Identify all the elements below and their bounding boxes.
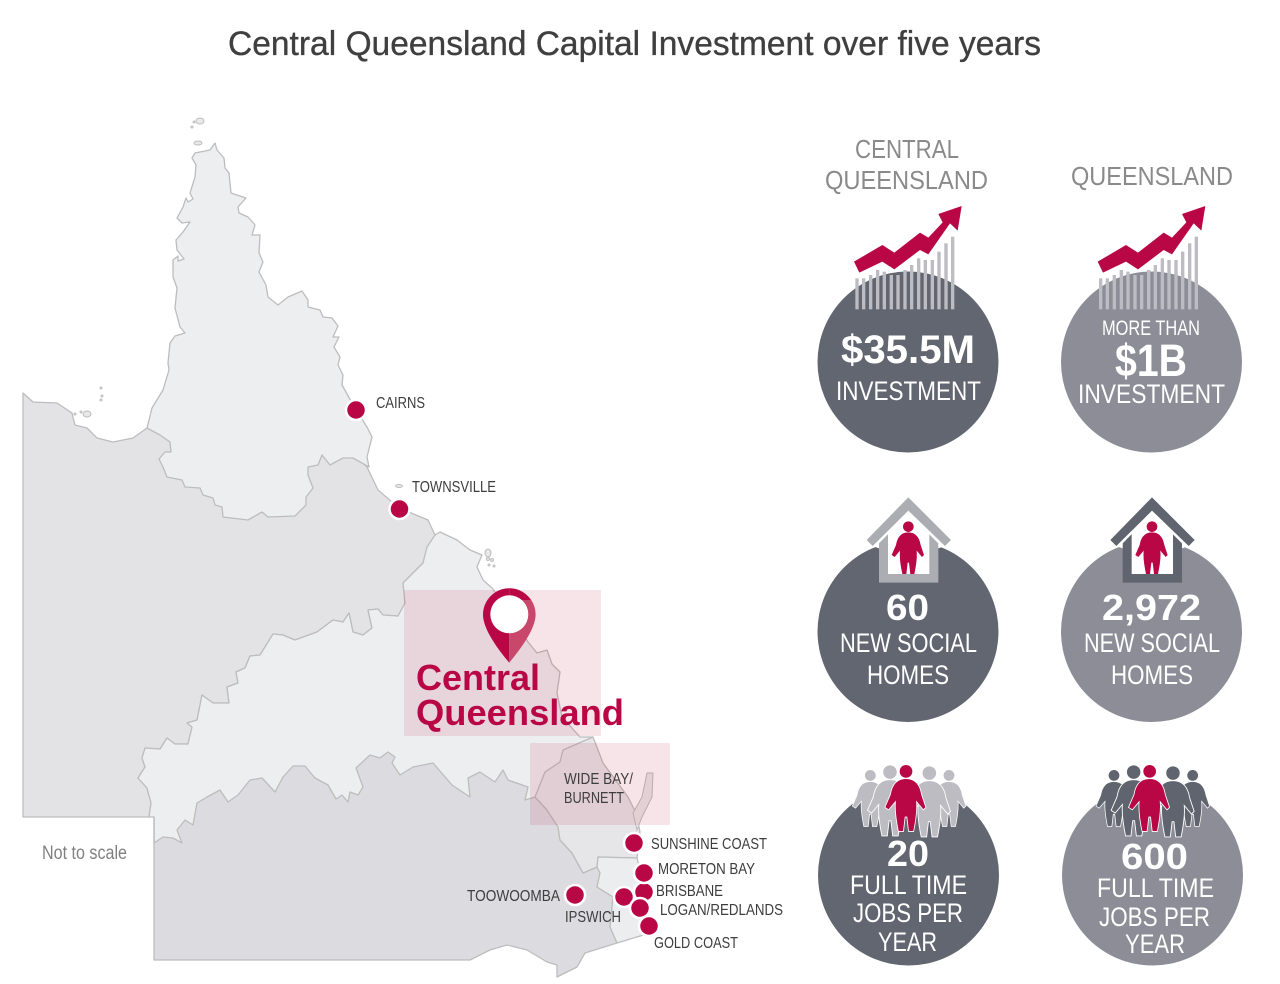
city labels: WIDE BAY/ — [564, 771, 633, 788]
icon: house with person — [1110, 497, 1195, 583]
city labels: MORETON BAY — [658, 861, 755, 878]
icon: growth chart — [1098, 206, 1205, 309]
city labels: BRISBANE — [656, 883, 723, 900]
label: Central Queensland: Central — [416, 657, 540, 698]
city labels: IPSWICH — [565, 909, 621, 926]
stat: Central Queensland investment: $35.5M — [841, 328, 975, 372]
stat: Central Queensland investment: INVESTMENT — [836, 376, 981, 406]
region: Wide Bay Burnett — [535, 737, 640, 873]
city labels: BURNETT — [564, 790, 624, 807]
region: north west — [23, 393, 435, 817]
stat: Queensland investment: INVESTMENT — [1078, 379, 1225, 409]
stat: Central Queensland social homes — [818, 497, 998, 722]
city markers — [346, 400, 659, 936]
city labels: LOGAN/REDLANDS — [660, 902, 783, 919]
city labels: CAIRNS — [376, 395, 425, 412]
city labels — [376, 395, 783, 952]
heading: Queensland column: QUEENSLAND — [1071, 161, 1233, 191]
stat: Central Queensland jobs: YEAR — [878, 927, 937, 957]
stat: Central Queensland jobs — [818, 765, 999, 966]
region: far north — [147, 143, 372, 520]
city labels: SUNSHINE COAST — [651, 836, 767, 853]
region: south west — [154, 752, 617, 977]
stat: Queensland investment: $1B — [1115, 335, 1187, 386]
stat: Central Queensland social homes: NEW SOCIAL — [840, 628, 977, 658]
city labels: GOLD COAST — [654, 935, 738, 952]
stat: Queensland investment — [1061, 206, 1242, 452]
icon: house with person — [867, 497, 951, 583]
region: central west and Central Queensland — [138, 532, 593, 843]
city labels: TOWNSVILLE — [412, 479, 496, 496]
icon: group of people — [852, 765, 966, 837]
stat: Queensland investment: MORE THAN — [1102, 317, 1200, 340]
icon: growth chart — [854, 206, 962, 309]
icon: group of people — [1096, 765, 1210, 837]
stat: Queensland jobs — [1062, 765, 1243, 966]
label: Central Queensland — [416, 657, 624, 733]
city labels: TOOWOOMBA — [467, 888, 560, 905]
stat: Queensland social homes: NEW SOCIAL — [1084, 628, 1220, 658]
map of Queensland — [23, 118, 653, 977]
heading: Central Queensland column: CENTRAL — [855, 134, 959, 164]
stat: Queensland jobs: YEAR — [1125, 929, 1185, 959]
stat: Central Queensland jobs: FULL TIME — [850, 870, 967, 900]
stat: Queensland jobs: 600 — [1121, 836, 1188, 877]
highlight: Central Queensland box — [404, 590, 601, 736]
region: South East Queensland — [597, 857, 650, 943]
stat: Central Queensland social homes: 60 — [886, 587, 929, 628]
stat: Queensland social homes: 2,972 — [1102, 587, 1201, 628]
note: not to scale: Not to scale — [42, 843, 127, 864]
label: Central Queensland: Queensland — [416, 692, 624, 733]
heading: Central Queensland column — [825, 134, 988, 195]
stat: Queensland social homes: HOMES — [1111, 660, 1193, 690]
stat: Queensland jobs: FULL TIME — [1097, 873, 1214, 903]
stat: Central Queensland jobs: JOBS PER — [853, 898, 963, 928]
stat: Queensland social homes — [1061, 497, 1242, 722]
icon: location pin — [483, 588, 536, 663]
stat: Queensland jobs: JOBS PER — [1099, 902, 1210, 932]
islands — [74, 118, 653, 830]
stat: Central Queensland investment — [818, 206, 998, 452]
stat: Central Queensland jobs: 20 — [887, 833, 929, 874]
title: Central Queensland Capital Investment over five years — [228, 25, 1041, 63]
heading: Central Queensland column: QUEENSLAND — [825, 165, 988, 195]
highlight: Wide Bay Burnett box — [530, 743, 670, 825]
stat: Central Queensland social homes: HOMES — [867, 660, 949, 690]
